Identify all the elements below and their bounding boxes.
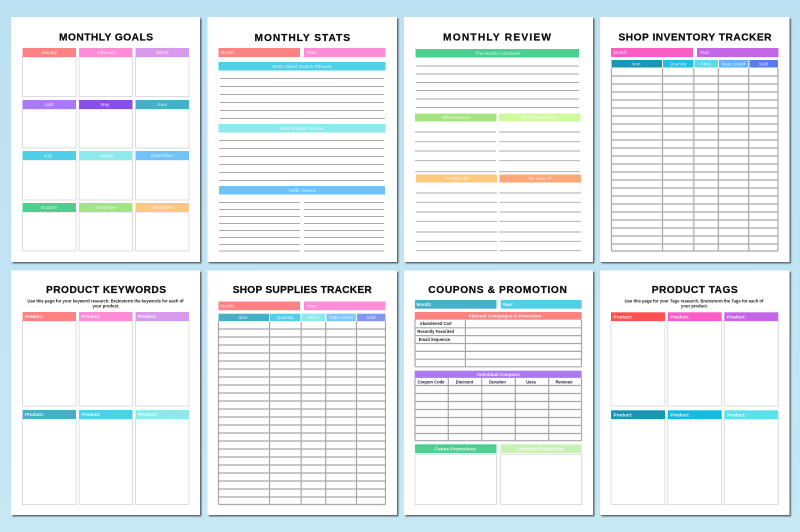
- field: year: Year:: [306, 304, 317, 308]
- section: most popular homes: Most Popular Homes: [281, 126, 324, 131]
- card: February: February: [97, 50, 116, 55]
- section: traffic source: Traffic Source: [288, 188, 317, 193]
- card: product 3: Product:: [727, 314, 746, 319]
- field: month: Month:: [416, 302, 432, 307]
- table: individual coupons: Duration: [489, 379, 506, 384]
- instructions text: [625, 298, 764, 308]
- section: what worked: [415, 114, 496, 172]
- field: month: Month:: [614, 50, 628, 55]
- table: planned campaigns and promotion: Abandoned Cart: [420, 321, 452, 326]
- card: product 3: [136, 312, 189, 406]
- card: product 3: [724, 312, 778, 406]
- panel: coupons and promotion: [404, 270, 593, 515]
- card: product 5: Product:: [670, 412, 690, 417]
- table: individual coupons: Coupon Code: [418, 379, 445, 384]
- table: inventory: [612, 60, 778, 251]
- instructions text: Use this page for your keyword research. Brainstorm the keywords for each of: [27, 298, 184, 304]
- card: March: March: [156, 50, 169, 55]
- heading: shop supplies tracker: SHOP SUPPLIES TRACKER: [233, 285, 372, 296]
- card: December: [136, 203, 189, 251]
- card: June: June: [157, 102, 167, 107]
- section: the month i achieved: [416, 49, 579, 108]
- section: most visited search phrases: Most Visited Search Phrases: [273, 64, 332, 69]
- card: product 1: [611, 312, 665, 406]
- card: product 6: [136, 410, 189, 504]
- instructions text: [27, 298, 184, 308]
- card: product 6: Product:: [727, 412, 746, 417]
- card: January: January: [41, 50, 58, 55]
- field: month: Month:: [220, 50, 235, 55]
- heading: monthly review: MONTHLY REVIEW: [443, 32, 551, 44]
- card: product 2: Product:: [670, 314, 690, 319]
- heading: monthly goals: MONTHLY GOALS: [59, 32, 153, 44]
- table: planned campaigns and promotion: [415, 312, 582, 367]
- section: the month i achieved: The Month I Achieved: [475, 51, 520, 56]
- panel: shop inventory tracker: [600, 17, 790, 262]
- card: September: [136, 151, 189, 200]
- field: month: [218, 302, 300, 310]
- card: product 6: [724, 410, 778, 504]
- panel: product keywords: [11, 270, 200, 515]
- card: product 2: [668, 312, 722, 406]
- heading: shop inventory tracker: SHOP INVENTORY TRACKER: [618, 32, 772, 44]
- card: August: August: [99, 153, 114, 158]
- heading: monthly stats: MONTHLY STATS: [254, 33, 350, 44]
- card: September: September: [151, 153, 174, 158]
- card: product 4: Product:: [25, 412, 44, 417]
- field: year: Year:: [700, 50, 710, 55]
- table: individual coupons: Uses: [526, 379, 537, 384]
- section: what didn't work: What Didn't Work: [522, 115, 558, 120]
- table: supplies: Item: [239, 315, 248, 320]
- instructions text: your product.: [92, 304, 120, 308]
- card: May: May: [101, 102, 110, 107]
- table: individual coupons: Discount: [456, 379, 474, 384]
- panel: monthly stats: [208, 17, 397, 262]
- field: month: [218, 48, 300, 57]
- section: most visited search phrases: [218, 62, 386, 118]
- section: do less of: Do Less Of: [529, 176, 552, 181]
- table: inventory: Price: [701, 62, 712, 66]
- card: November: [79, 203, 132, 251]
- card: March: [136, 48, 189, 96]
- card: product 1: Product:: [25, 314, 44, 319]
- table: supplies: Quantity: [276, 315, 294, 320]
- card: November: November: [95, 205, 117, 210]
- instructions text: your product.: [681, 304, 708, 308]
- card: product 4: [611, 410, 665, 504]
- heading: coupons and promotion: COUPONS & PROMOTION: [428, 285, 567, 296]
- card: product 4: Product:: [614, 412, 633, 417]
- table: inventory: Item: [632, 62, 641, 66]
- table: planned campaigns and promotion: Planned Campaigns & Promotion: [469, 314, 542, 318]
- section: most popular homes: [218, 124, 386, 180]
- panel: monthly review: [404, 17, 593, 262]
- instructions text: Use this page for your Tags research. Brainstorm the Tags for each of: [625, 298, 764, 304]
- card: product 2: [79, 312, 132, 406]
- panel: monthly goals: [11, 17, 200, 262]
- table: planned campaigns and promotion: Recently Favorited: [417, 329, 455, 334]
- table: individual coupons: Individual Coupons: [477, 372, 520, 377]
- card: holidays and celebration: Holidays/Celebration: [518, 446, 564, 451]
- card: product 4: [22, 410, 76, 504]
- card: product 3: Product:: [138, 314, 157, 319]
- card: product 5: Product:: [82, 412, 101, 417]
- section: traffic source: [219, 186, 385, 251]
- card: product 2: Product:: [82, 314, 101, 319]
- field: year: [697, 48, 778, 57]
- field: month: [415, 300, 496, 309]
- table: planned campaigns and promotion: Email Sequence: [419, 337, 451, 342]
- card: product 6: Product:: [138, 412, 157, 417]
- field: year: Year:: [306, 50, 317, 55]
- card: July: July: [44, 153, 53, 158]
- card: June: [136, 100, 189, 148]
- card: product 5: [79, 410, 132, 504]
- section: do more of: Do More Of: [445, 176, 469, 181]
- table: inventory: Sold: [759, 62, 769, 66]
- card: April: April: [44, 102, 54, 107]
- card: October: October: [41, 205, 58, 210]
- field: year: Year:: [502, 302, 514, 307]
- card: January: [22, 48, 76, 96]
- table: inventory: Quantity: [669, 62, 687, 66]
- card: May: [79, 100, 132, 148]
- table: individual coupons: Revenue: [555, 379, 573, 384]
- field: month: [611, 48, 693, 57]
- table: supplies: Sold: [366, 315, 376, 320]
- table: supplies: Price: [308, 315, 319, 320]
- field: month: Month:: [220, 304, 235, 308]
- card: product 1: Product:: [614, 314, 633, 319]
- section: what worked: What Worked: [442, 115, 470, 120]
- card: product 5: [668, 410, 722, 504]
- panel: shop supplies tracker: [208, 270, 397, 515]
- table: individual coupons: [415, 371, 582, 441]
- heading: product tags: PRODUCT TAGS: [652, 285, 738, 296]
- field: year: [304, 302, 386, 310]
- field: year: [304, 48, 386, 57]
- table: supplies: [218, 314, 386, 504]
- section: do more of: [416, 174, 497, 251]
- table: supplies: Date Listed: [329, 315, 353, 320]
- card: August: [79, 151, 132, 200]
- section: do less of: [500, 174, 581, 251]
- card: future promotions: Future Promotions: [435, 446, 476, 451]
- section: what didn't work: [499, 114, 580, 172]
- heading: product keywords: PRODUCT KEYWORDS: [46, 285, 166, 296]
- card: July: [22, 151, 76, 200]
- card: future promotions: [415, 444, 496, 504]
- card: April: [22, 100, 76, 148]
- table: inventory: Date Listed: [722, 62, 746, 66]
- card: October: [22, 203, 76, 251]
- card: February: [79, 48, 132, 96]
- panel: product tags: [600, 270, 790, 515]
- card: December: December: [151, 205, 173, 210]
- field: year: [501, 300, 582, 309]
- card: product 1: [22, 312, 76, 406]
- card: holidays and celebration: [501, 444, 582, 504]
